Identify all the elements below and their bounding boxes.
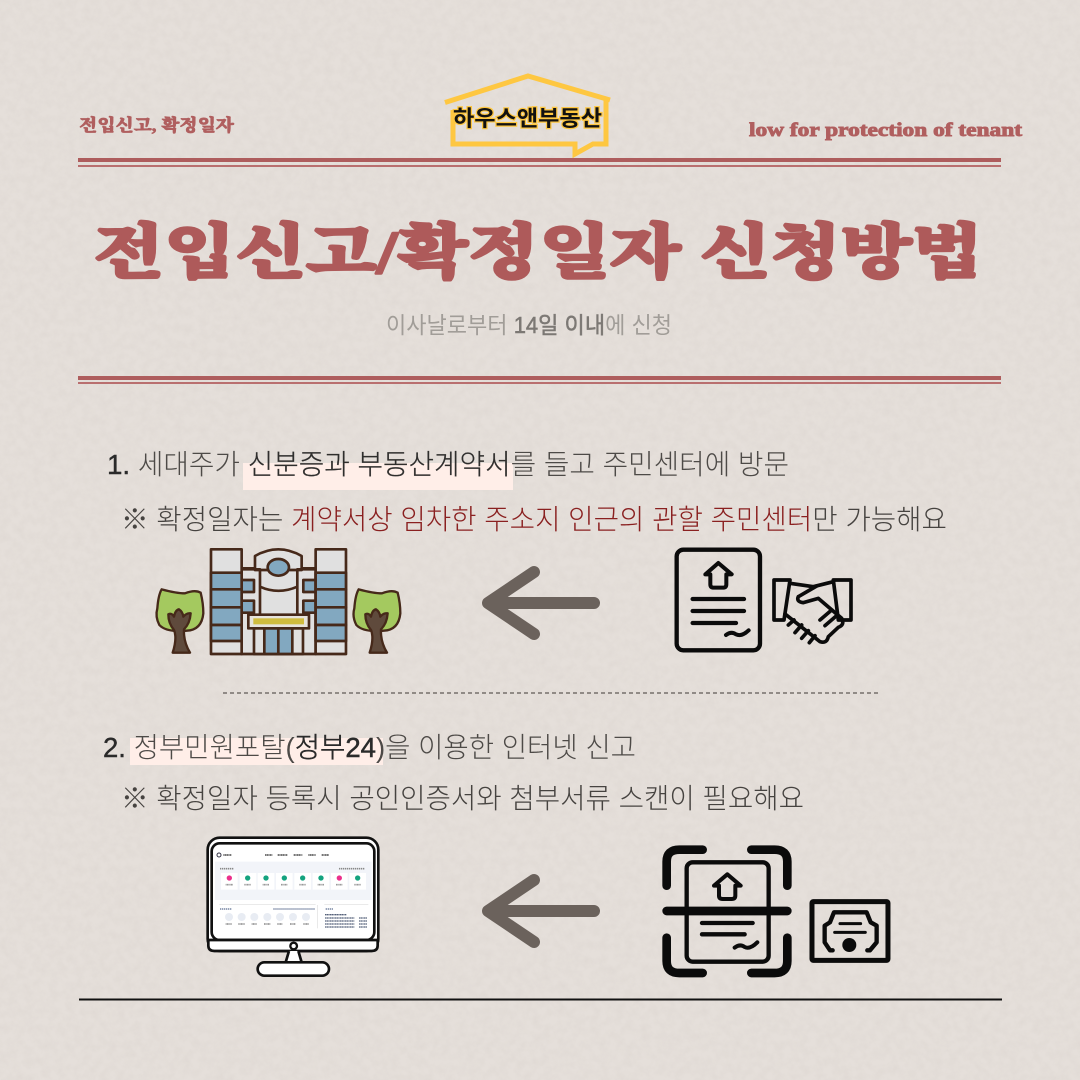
icon: contract and handshake xyxy=(677,550,851,650)
step 1 heading: 1. 세대주가 신분증과 부동산계약서를 들고 주민센터에 방문 xyxy=(107,449,789,480)
logo text: 하우스앤부동산 xyxy=(453,106,602,131)
divider xyxy=(223,692,878,694)
arrow: step 1 xyxy=(488,572,594,634)
step 2 heading: 2. 정부민원포탈(정부24)을 이용한 인터넷 신고 xyxy=(103,732,636,763)
logo: house speech bubble xyxy=(445,76,610,154)
title: 전입신고/확정일자 신청방법 xyxy=(93,220,983,286)
subtitle: 이사날로부터 14일 이내에 신청 xyxy=(386,312,672,338)
icon: document scan xyxy=(667,850,888,973)
step 1 note: ※ 확정일자는 계약서상 임차한 주소지 인근의 관할 주민센터만 가능해요 xyxy=(121,504,947,535)
step 2 note: ※ 확정일자 등록시 공인인증서와 첨부서류 스캔이 필요해요 xyxy=(121,783,804,814)
header label: left: 전입신고, 확정일자 xyxy=(79,115,235,135)
arrow: step 2 xyxy=(488,880,594,942)
step 2 xyxy=(103,732,636,765)
icon: community centre with trees xyxy=(157,549,400,654)
header label: right: low for protection of tenant xyxy=(749,121,1023,141)
icon: monitor with government portal xyxy=(208,838,378,976)
step 1 xyxy=(107,449,789,490)
